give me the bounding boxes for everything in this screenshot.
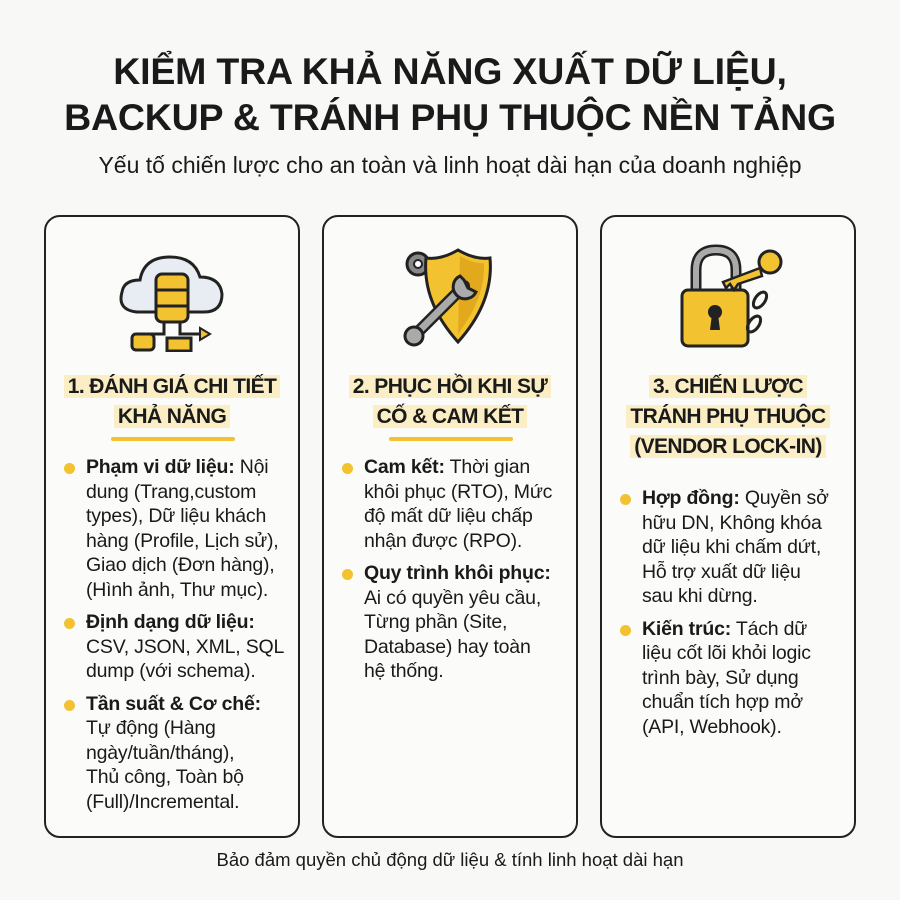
heading xyxy=(626,374,830,458)
body text: (Full)/Incremental. xyxy=(86,790,239,812)
body text: Hỗ trợ xuất dữ liệu xyxy=(642,560,801,582)
body text: Kiến trúc: Tách dữ xyxy=(642,618,807,640)
footer: Bảo đảm quyền chủ động dữ liệu & tính linh hoạt dài hạn xyxy=(216,849,684,870)
body text: hàng (Profile, Lịch sử), xyxy=(86,530,279,552)
icon: padlock key xyxy=(680,244,782,348)
body text xyxy=(620,487,829,738)
heading: CỐ & CAM KẾT xyxy=(377,405,523,428)
title xyxy=(64,50,836,138)
panel: recovery xyxy=(322,215,578,838)
body text xyxy=(342,456,552,682)
body text: dung (Trang,custom xyxy=(86,480,256,502)
heading: KHẢ NĂNG xyxy=(118,405,226,428)
body text: Ai có quyền yêu cầu, xyxy=(364,586,541,608)
body text: Tự động (Hàng xyxy=(86,717,216,739)
body text: độ mất dữ liệu chấp xyxy=(364,505,533,527)
body text: Định dạng dữ liệu: xyxy=(86,611,255,633)
subtitle: Yếu tố chiến lược cho an toàn và linh hoạt dài hạn của doanh nghiệp xyxy=(98,152,802,178)
heading xyxy=(64,374,280,428)
title: KIỂM TRA KHẢ NĂNG XUẤT DỮ LIỆU, xyxy=(113,50,787,92)
panel: vendor lock-in xyxy=(600,215,856,838)
body text: (Hình ảnh, Thư mục). xyxy=(86,578,268,600)
body text: Phạm vi dữ liệu: Nội xyxy=(86,456,268,478)
body text: Hợp đồng: Quyền sở xyxy=(642,487,829,509)
heading xyxy=(349,374,551,428)
body text: liệu cốt lõi khỏi logic xyxy=(642,642,811,664)
heading: TRÁNH PHỤ THUỘC xyxy=(630,405,826,428)
heading: 3. CHIẾN LƯỢC xyxy=(653,375,803,398)
panel: data export xyxy=(44,215,300,838)
body text: hữu DN, Không khóa xyxy=(642,512,822,534)
body text: dữ liệu khi chấm dứt, xyxy=(642,536,821,558)
body text: khôi phục (RTO), Mức xyxy=(364,480,552,502)
body text: Cam kết: Thời gian xyxy=(364,456,530,478)
body text: trình bày, Sử dụng xyxy=(642,666,799,688)
body text: Thủ công, Toàn bộ xyxy=(86,766,244,788)
heading: 2. PHỤC HỒI KHI SỰ xyxy=(353,375,547,398)
icon: shield wrench xyxy=(404,248,492,346)
icon: cloud database xyxy=(120,256,224,352)
body text: nhận được (RPO). xyxy=(364,530,522,552)
title: BACKUP & TRÁNH PHỤ THUỘC NỀN TẢNG xyxy=(64,96,836,138)
heading: 1. ĐÁNH GIÁ CHI TIẾT xyxy=(68,375,276,398)
body text: CSV, JSON, XML, SQL xyxy=(86,636,284,658)
heading: (VENDOR LOCK-IN) xyxy=(634,435,822,458)
body text: (API, Webhook). xyxy=(642,716,782,738)
body text: Quy trình khôi phục: xyxy=(364,562,551,584)
body text: dump (với schema). xyxy=(86,660,256,682)
body text: chuẩn tích hợp mở xyxy=(642,691,803,713)
body text: ngày/tuần/tháng), xyxy=(86,742,234,764)
body text: types), Dữ liệu khách xyxy=(86,505,266,527)
body text: Database) hay toàn xyxy=(364,636,531,658)
body text: Tần suất & Cơ chế: xyxy=(86,692,261,714)
body text: sau khi dừng. xyxy=(642,585,758,607)
body text: Giao dịch (Đơn hàng), xyxy=(86,554,275,576)
body text: Từng phần (Site, xyxy=(364,611,507,633)
body text: hệ thống. xyxy=(364,660,444,682)
body text xyxy=(64,456,284,812)
